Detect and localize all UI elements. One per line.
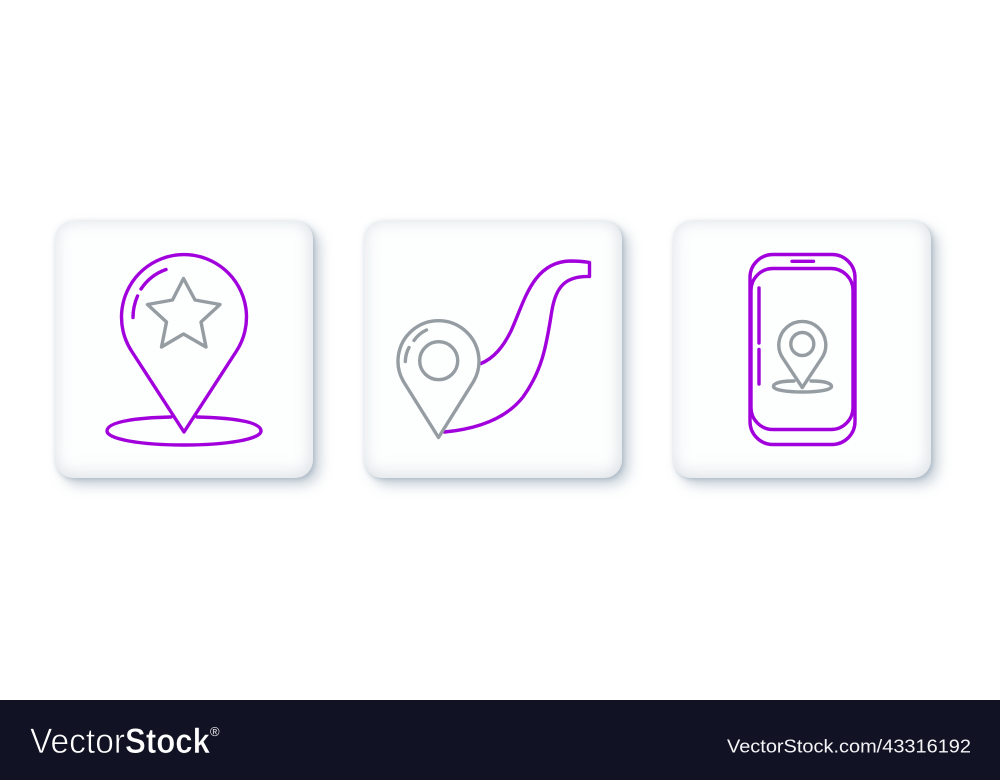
logo: VectorStock: Vector [30,722,125,761]
route ribbon [444,261,590,432]
icon: smartphone with location pin [750,254,855,444]
pin circle [420,342,458,380]
panel: phone pin card [673,221,931,478]
screen highlights [757,288,761,384]
logo: VectorStock [30,722,220,761]
phone screen [751,268,853,430]
pin base ellipse [107,417,261,445]
pin highlights [405,330,426,362]
icon: location pin with route ribbon [398,261,590,438]
phone body [750,254,855,444]
pin outline [398,321,479,438]
pin ellipse [774,381,832,392]
panel: route pin card [364,221,622,478]
pin outline [779,321,826,388]
logo: VectorStock: Stock [125,722,210,761]
panel: star pin card [55,221,313,478]
logo: VectorStock: ® [210,724,220,739]
footer bar [0,700,1000,780]
pin circle [791,332,814,356]
phone speaker [792,260,814,263]
icon: location pin with star [107,255,261,445]
image id URL: VectorStock.com/43316192 [727,736,971,756]
pin highlights [133,270,166,318]
pin outline [122,255,247,432]
star [148,278,220,347]
